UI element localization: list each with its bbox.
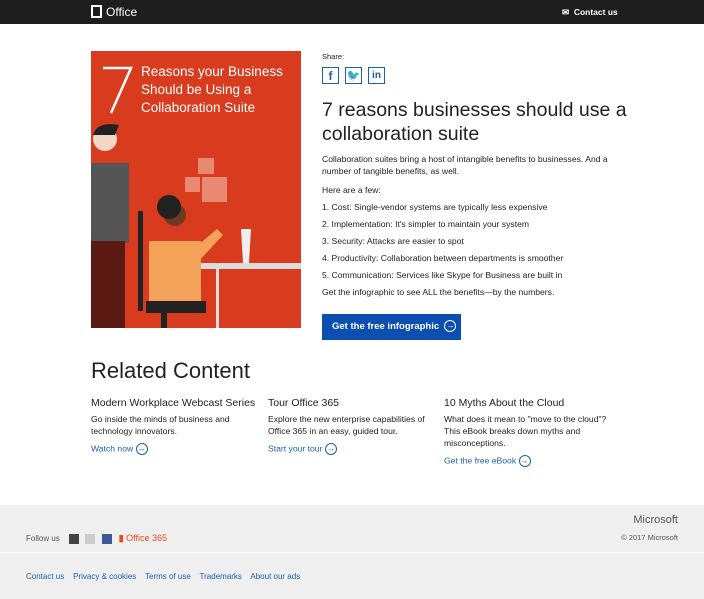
share icons: f (328, 69, 332, 83)
hero image (91, 51, 301, 328)
body text: 1. Cost: Single-vendor systems are typically less expensive (322, 202, 547, 212)
share icons: 🐦 (347, 70, 360, 82)
column 2: Office 365 in an easy, guided tour. (268, 426, 398, 436)
CTA button: → (446, 321, 454, 330)
column 1: technology innovators. (91, 426, 177, 436)
share: Share: (322, 52, 344, 61)
body text: Get the infographic to see ALL the benefits—by the numbers. (322, 287, 554, 297)
body text: number of tangible benefits, as well. (322, 166, 459, 176)
column 1: Watch now (91, 443, 133, 453)
main title (322, 99, 627, 145)
main title: 7 reasons businesses should use a (322, 99, 627, 121)
column 1: Modern Workplace Webcast Series (91, 397, 255, 409)
body text (322, 154, 608, 297)
column 2: Start your tour (268, 443, 322, 453)
CTA button (322, 314, 461, 340)
image title: Should be Using a (141, 82, 251, 97)
header bar (0, 0, 704, 24)
related content heading: Related Content (91, 358, 250, 383)
illustration (91, 124, 301, 328)
body text: 3. Security: Attacks are easier to spot (322, 236, 464, 246)
column 3: What does it mean to "move to the cloud"? (444, 414, 606, 424)
logo: Office: Office (106, 5, 137, 19)
image title: Reasons your Business (141, 64, 283, 79)
column 2: Explore the new enterprise capabilities of (268, 414, 425, 424)
body text: Here are a few: (322, 185, 381, 195)
column 1 (91, 397, 255, 455)
column 2 (268, 397, 425, 455)
share icons: in (372, 70, 381, 81)
column 3: 10 Myths About the Cloud (444, 397, 564, 409)
body text: Collaboration suites bring a host of intangible benefits to businesses. And a (322, 154, 608, 164)
contact us: ✉ Contact us (562, 7, 618, 17)
image title (141, 64, 283, 115)
main title: collaboration suite (322, 123, 479, 145)
share icons (322, 67, 385, 84)
column 2: → (327, 444, 335, 453)
body text: 2. Implementation: It's simpler to maintain your system (322, 219, 529, 229)
column 3: Get the free eBook (444, 455, 516, 465)
column 3 (444, 397, 606, 467)
microsoft brand: Microsoft (633, 514, 678, 526)
logo: Office (91, 5, 137, 19)
follow us: Follow us ▮ Office 365 (26, 533, 167, 543)
body text: 4. Productivity: Collaboration between departments is smoother (322, 253, 563, 263)
column 2: Tour Office 365 (268, 397, 339, 409)
image number 7 (103, 66, 133, 114)
column 1: Go inside the minds of business and (91, 414, 230, 424)
body text: 5. Communication: Services like Skype for Business are built in (322, 270, 562, 280)
image title: Collaboration Suite (141, 100, 255, 115)
column 3: → (521, 456, 529, 465)
column 3: This eBook breaks down myths and (444, 426, 580, 436)
footer: © 2017 Microsoft (621, 533, 678, 542)
column 1: → (138, 444, 146, 453)
CTA button: Get the free infographic (332, 321, 439, 332)
footer links: Contact us Privacy & cookies Terms of use Trademarks About our ads (26, 572, 300, 581)
footer (0, 505, 704, 599)
column 3: misconceptions. (444, 438, 506, 448)
